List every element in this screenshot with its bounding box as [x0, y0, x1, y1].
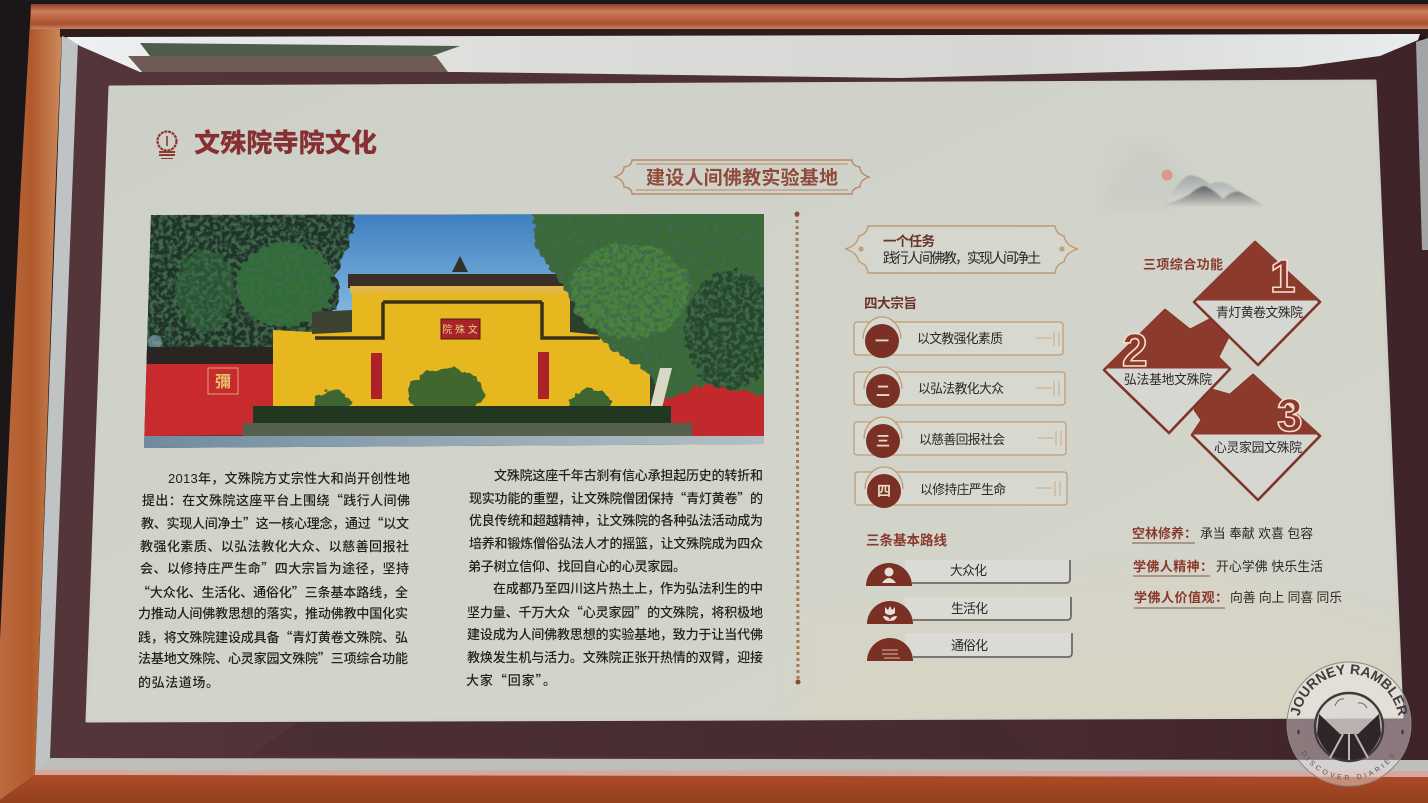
text block: right column [466, 465, 763, 689]
value 1: 空林修养： [1132, 526, 1197, 541]
diamond 1: 青灯黄卷文殊院 [1216, 305, 1303, 320]
purpose 2: 以弘法教化大众 [918, 381, 1004, 396]
text block: right column: 文殊院这座千年古刹有信心承担起历史的转折和 [494, 465, 763, 484]
text block: right column: 大家“回家”。 [466, 670, 556, 689]
left tree [140, 212, 355, 368]
value 1 [1132, 526, 1313, 543]
logo badge: road scene [1315, 693, 1383, 761]
route 1 [860, 560, 1070, 586]
purpose 4: 四 [877, 483, 891, 499]
text block: right column: 现实功能的重塑，让文殊院僧团保持“青灯黄卷”的 [469, 488, 763, 507]
diamond 3: 心灵家园文殊院 [1214, 440, 1302, 455]
diamond 1: 1 [1270, 250, 1296, 302]
purpose 1 [854, 317, 1063, 358]
purpose 2: 二 [876, 383, 890, 399]
route 2: 生活化 [951, 601, 988, 616]
photo: temple gate [140, 210, 775, 452]
text block: left column: 法基地文殊院、心灵家园文殊院”三项综合功能 [138, 648, 408, 667]
text block: left column: 教、实现人间净土”这一核心理念，通过“以文 [141, 513, 409, 532]
purpose 1: 以文教强化素质 [917, 331, 1003, 346]
photo: temple gate: 院 殊 文 [442, 323, 478, 336]
ink mountains with sun [1100, 143, 1266, 208]
panel: one task: 一个任务 [883, 234, 936, 249]
purpose 4: 以修持庄严生命 [920, 482, 1006, 497]
watermark logo: DISCOVER DIARIES [1302, 750, 1394, 780]
banner heading [615, 160, 869, 194]
text block: right column: 优良传统和超越精神，让文殊院的各种弘法活动成为 [469, 510, 763, 529]
diamond 3 [1192, 375, 1320, 500]
watermark logo: JOURNEY RAMBLER [1290, 664, 1408, 716]
value 3: 向善 向上 同喜 同乐 [1230, 590, 1342, 605]
purpose 3: 以慈善回报社会 [919, 432, 1005, 447]
text block: left column: “大众化、生活化、通俗化”三条基本路线，全 [137, 582, 408, 601]
text block: right column: 坚力量、千万大众“心灵家园”的文殊院，将积极地 [467, 602, 763, 621]
purpose 3 [854, 417, 1066, 458]
text block: left column [137, 468, 410, 691]
value 2 [1133, 559, 1323, 576]
diamond 1 [1194, 242, 1320, 365]
photo: temple gate: 彌 [215, 373, 231, 391]
right tree [532, 210, 775, 400]
hedge and bushes [314, 366, 612, 406]
red walls [144, 364, 274, 436]
heading: 四大宗旨 [864, 295, 917, 311]
diamond 2: 2 [1122, 324, 1148, 376]
banner heading: 建设人间佛教实验基地 [646, 166, 838, 189]
value 3: 学佛人价值观： [1134, 590, 1228, 605]
route 3 [861, 633, 1072, 661]
text block: left column: 力推动人间佛教思想的落实，推动佛教中国化实 [138, 603, 408, 622]
star markers [1297, 729, 1404, 735]
purpose 4 [855, 467, 1067, 508]
text block: left column: 教强化素质、以弘法教化大众、以慈善回报社 [140, 536, 409, 555]
value 2: 开心学佛 快乐生活 [1216, 559, 1323, 574]
text block: right column: 教焕发生机与活力。文殊院正张开热情的双臂，迎接 [467, 647, 763, 666]
purpose 1: 一 [875, 333, 889, 349]
panel: one task: 践行人间佛教，实现人间净土 [883, 250, 1041, 266]
text block: right column: 培养和锻炼僧俗弘法人才的摇篮，让文殊院成为四众 [469, 533, 763, 552]
yellow wall [273, 292, 650, 408]
sky [330, 214, 560, 320]
diamond 3: 3 [1277, 389, 1303, 441]
heading: 三条基本路线 [866, 532, 948, 548]
text block: right column: 在成都乃至四川这片热土上，作为弘法利生的中 [493, 578, 763, 597]
panel: three routes [860, 532, 1072, 661]
text block: left column: 2013年，文殊院方丈宗性大和尚开创性地 [168, 468, 410, 487]
panel: one task [845, 226, 1078, 273]
icon: temple emblem [158, 132, 176, 158]
watermark logo [1286, 662, 1412, 786]
value 3 [1134, 590, 1342, 608]
title with logo: 文殊院寺院文化 [194, 128, 377, 158]
value 1: 承当 奉献 欢喜 包容 [1200, 526, 1313, 541]
panel: three functions [1104, 242, 1320, 500]
value 2: 学佛人精神： [1133, 559, 1213, 574]
purpose 2 [854, 367, 1065, 408]
dotted vertical divider [794, 212, 800, 684]
text block: left column: 提出：在文殊院这座平台上围绕“践行人间佛 [142, 490, 410, 509]
main panel [87, 81, 1402, 721]
photo: temple gate: 阿 [690, 371, 706, 389]
text block: right column: 弟子树立信仰、找回自心的心灵家园。 [468, 556, 686, 575]
panel: four purposes [854, 295, 1067, 508]
text block: values [1132, 526, 1342, 608]
text block: left column: 践，将文殊院建设成具备“青灯黄卷文殊院、弘 [138, 627, 408, 646]
route 2 [861, 597, 1071, 624]
text block: left column: 的弘法道场。 [138, 672, 219, 691]
diamond 2: 弘法基地文殊院 [1124, 372, 1212, 387]
text block: left column: 会、以修持庄严生命”四大宗旨为途径，坚持 [140, 558, 409, 577]
route 3: 通俗化 [951, 638, 988, 653]
text block: right column: 建设成为人间佛教思想的实验基地，致力于让当代佛 [467, 624, 763, 643]
sign plaque [441, 319, 480, 339]
route 1: 大众化 [950, 563, 987, 578]
character plaques [208, 368, 238, 394]
diamond 2 [1104, 310, 1230, 433]
purpose 3: 三 [876, 433, 890, 449]
heading: 三项综合功能 [1143, 257, 1223, 272]
